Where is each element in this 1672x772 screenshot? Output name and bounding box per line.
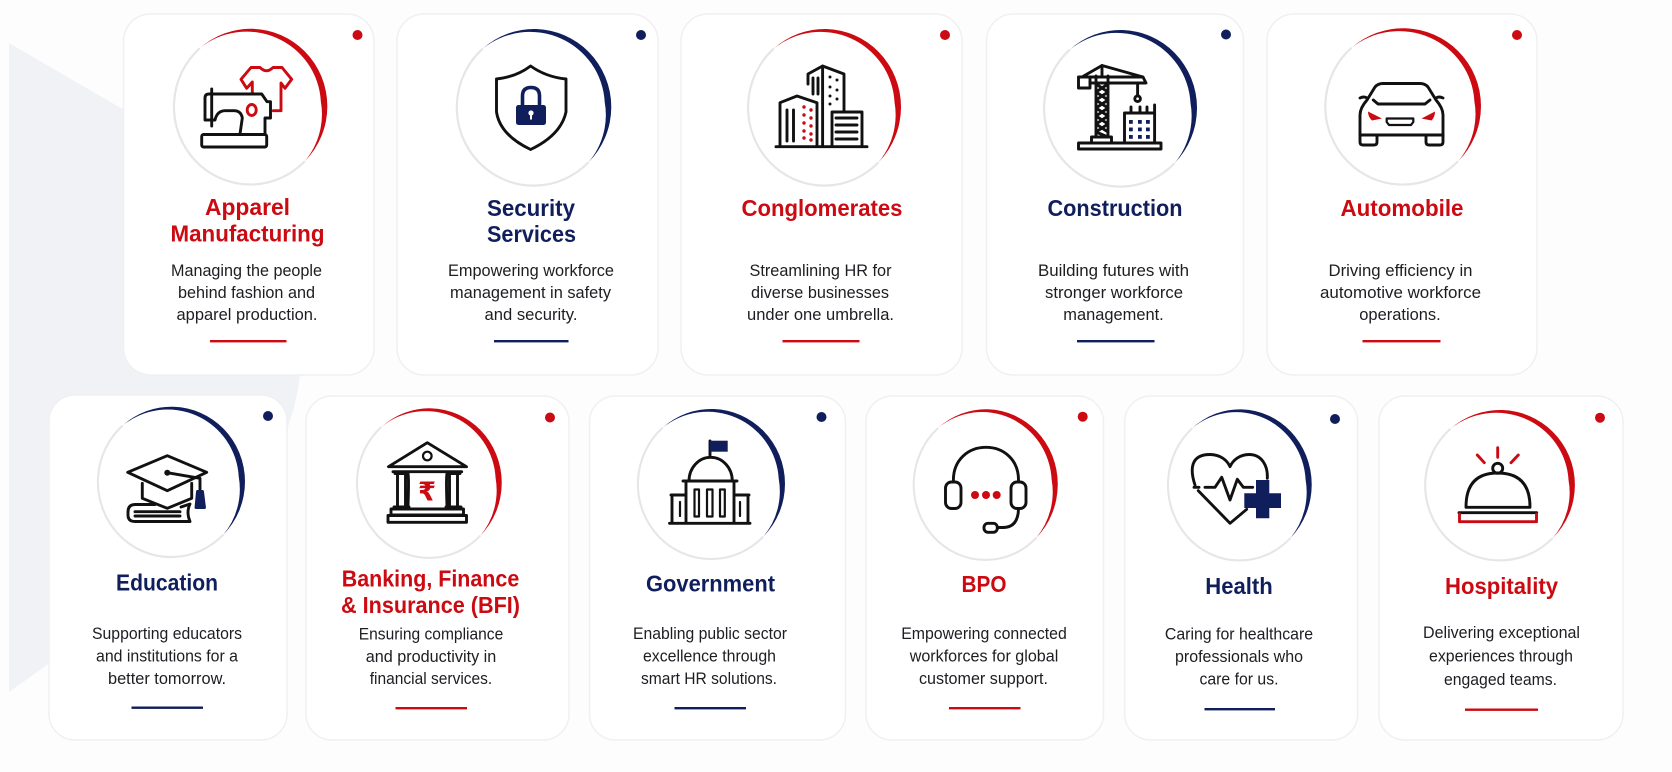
accent rule xyxy=(494,340,568,342)
description: Enabling public sector xyxy=(633,624,787,643)
ring xyxy=(914,409,1058,560)
accent rule xyxy=(1465,708,1538,711)
icon glyph: rupee: ₹ xyxy=(418,478,436,508)
ring xyxy=(1044,30,1197,187)
description: customer support. xyxy=(919,669,1048,688)
accent rule xyxy=(782,340,860,342)
icon: tower crane and building xyxy=(1078,66,1161,149)
panel: health xyxy=(1125,396,1358,740)
title: Automobile xyxy=(1340,195,1464,221)
card background xyxy=(49,395,287,740)
description xyxy=(359,624,503,688)
title: Banking, Finance xyxy=(342,566,519,592)
title: Conglomerates xyxy=(742,195,902,221)
title: Hospitality xyxy=(1445,573,1558,599)
icon: service bell xyxy=(1459,448,1537,522)
dot xyxy=(940,30,950,40)
ring xyxy=(174,29,327,184)
description xyxy=(448,261,614,324)
description: professionals who xyxy=(1175,647,1303,666)
ring xyxy=(457,29,611,186)
title xyxy=(341,566,520,618)
description: workforces for global xyxy=(909,646,1058,666)
accent rule xyxy=(1362,340,1440,342)
panel: banking finance insurance xyxy=(306,396,569,740)
panel: security services xyxy=(397,14,658,375)
description xyxy=(1038,261,1189,324)
card background xyxy=(1125,396,1358,740)
ring xyxy=(357,408,502,558)
accent rule xyxy=(1204,708,1275,710)
accent rule xyxy=(396,707,467,709)
description xyxy=(1423,623,1580,689)
icon: car front xyxy=(1360,84,1443,145)
dot xyxy=(1221,30,1231,40)
description: financial services. xyxy=(370,669,492,688)
description: behind fashion and xyxy=(178,283,315,302)
description: under one umbrella. xyxy=(747,305,894,324)
description: smart HR solutions. xyxy=(641,669,777,688)
description: care for us. xyxy=(1200,670,1278,688)
card background xyxy=(986,14,1244,375)
dot xyxy=(263,411,273,421)
card background xyxy=(866,396,1104,740)
title: Services xyxy=(487,221,576,247)
dot xyxy=(352,30,362,40)
panel: automobile xyxy=(1267,14,1537,375)
ring xyxy=(98,407,245,557)
card background xyxy=(1379,396,1623,740)
icon: heart with pulse and cross xyxy=(1192,454,1281,523)
description xyxy=(633,624,787,688)
description: experiences through xyxy=(1429,647,1573,666)
title xyxy=(170,194,324,246)
background arrow shape xyxy=(9,43,300,692)
description: engaged teams. xyxy=(1444,670,1557,689)
accent rule xyxy=(1077,340,1154,342)
card background xyxy=(124,14,374,375)
title: Construction xyxy=(1048,195,1182,221)
ring xyxy=(638,409,785,559)
description xyxy=(1320,261,1481,324)
title: Education xyxy=(116,570,218,596)
ring xyxy=(1168,409,1312,560)
card background xyxy=(590,396,846,740)
description: Delivering exceptional xyxy=(1423,623,1580,642)
description xyxy=(747,261,894,324)
ring xyxy=(748,29,901,186)
description: diverse businesses xyxy=(751,283,889,302)
description: operations. xyxy=(1359,305,1441,324)
description: Empowering connected xyxy=(901,624,1067,643)
panel: conglomerates xyxy=(681,14,962,375)
icon: graduation cap on book xyxy=(128,456,207,522)
description: automotive workforce xyxy=(1320,283,1481,302)
card background xyxy=(306,396,569,740)
ring xyxy=(1425,410,1575,560)
description: Supporting educators xyxy=(92,624,242,643)
description: stronger workforce xyxy=(1045,283,1183,302)
description xyxy=(92,624,242,688)
panel: government xyxy=(590,396,846,740)
dot xyxy=(545,412,555,422)
icon: sewing machine and shirt xyxy=(202,68,292,147)
card background xyxy=(1267,14,1537,375)
panel: construction xyxy=(986,14,1244,375)
panel: BPO xyxy=(866,396,1104,740)
icon: headset xyxy=(946,447,1026,532)
description: apparel production. xyxy=(176,305,318,324)
description: and productivity in xyxy=(366,647,496,666)
icon: bank building with rupee xyxy=(388,443,466,522)
description: Driving efficiency in xyxy=(1328,261,1472,280)
description: Managing the people xyxy=(171,261,322,280)
description xyxy=(171,261,322,324)
description xyxy=(1165,624,1313,688)
panel: apparel manufacturing xyxy=(124,14,374,375)
dot xyxy=(1595,413,1605,423)
dot xyxy=(816,412,826,422)
title: Government xyxy=(646,571,775,597)
title: Manufacturing xyxy=(170,220,324,246)
description: better tomorrow. xyxy=(108,669,226,688)
title: & Insurance (BFI) xyxy=(341,592,520,618)
card background xyxy=(397,14,658,375)
icon: capitol building xyxy=(670,441,750,523)
title: Health xyxy=(1205,573,1273,599)
title: Security xyxy=(487,195,575,221)
dot xyxy=(1512,30,1522,40)
ring xyxy=(1325,28,1481,185)
description: management. xyxy=(1063,305,1164,324)
dot xyxy=(1330,414,1340,424)
dot xyxy=(636,30,646,40)
description: management in safety xyxy=(450,283,611,302)
icon: office buildings xyxy=(776,66,867,147)
card background xyxy=(681,14,962,375)
icon: shield with lock xyxy=(496,66,566,150)
title: Apparel xyxy=(205,194,290,220)
dot xyxy=(1078,412,1088,422)
accent rule xyxy=(210,340,286,342)
description: Building futures with xyxy=(1038,261,1189,280)
description: and institutions for a xyxy=(96,646,238,666)
description: Ensuring compliance xyxy=(359,624,503,644)
description: Empowering workforce xyxy=(448,261,614,280)
title xyxy=(487,195,576,247)
title: BPO xyxy=(962,571,1006,597)
description: and security. xyxy=(484,305,578,324)
panel: education xyxy=(49,395,287,740)
accent rule xyxy=(674,707,746,709)
description: Streamlining HR for xyxy=(750,261,892,280)
description: excellence through xyxy=(643,646,776,666)
accent rule xyxy=(949,707,1020,709)
description xyxy=(901,624,1067,688)
panel: hospitality xyxy=(1379,396,1623,740)
description: Caring for healthcare xyxy=(1165,624,1313,644)
accent rule xyxy=(132,706,203,709)
